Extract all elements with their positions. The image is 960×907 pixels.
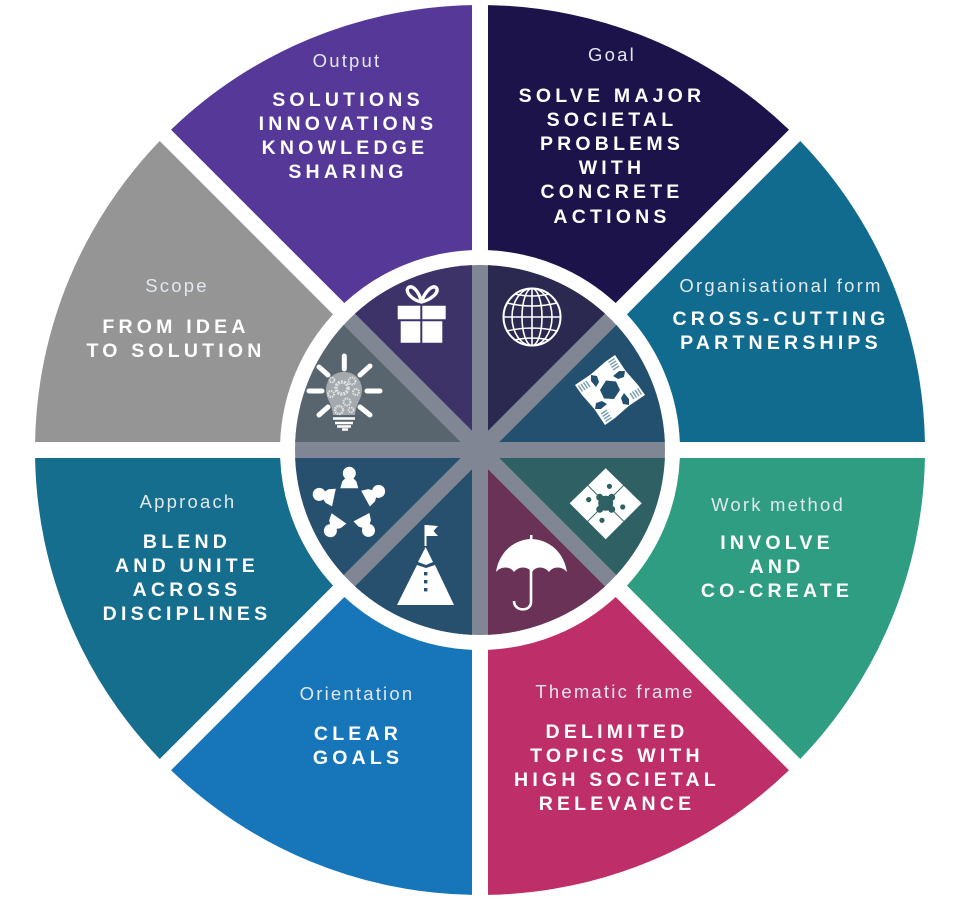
panel: output — [171, 5, 472, 303]
segment: goal — [488, 5, 789, 303]
icon: globe — [504, 288, 560, 346]
panel: orientation — [171, 597, 472, 895]
panel: thematic frame — [488, 597, 789, 895]
heading: work method: AND — [750, 556, 804, 578]
segment: work method — [627, 458, 925, 759]
panel: organisational form — [627, 141, 925, 442]
heading: thematic frame: RELEVANCE — [539, 793, 695, 815]
heading: goal: PROBLEMS — [540, 133, 684, 155]
inner icon disc — [295, 265, 665, 635]
icon: gift — [398, 287, 446, 343]
heading: scope: FROM IDEA — [102, 316, 250, 338]
panel: approach — [35, 458, 333, 759]
heading: goal: SOLVE MAJOR — [519, 85, 705, 107]
label: output: Output — [313, 50, 381, 71]
heading: goal: SOCIETAL — [547, 109, 677, 131]
icon: light bulb with gears — [309, 356, 380, 430]
segment: orientation — [171, 597, 472, 895]
heading: output: SHARING — [288, 161, 408, 183]
heading: goal: CONCRETE — [540, 181, 684, 203]
heading: approach: AND UNITE — [115, 555, 259, 577]
heading: output: SOLUTIONS — [272, 89, 424, 111]
heading: scope: TO SOLUTION — [86, 340, 266, 362]
heading: organisational form: PARTNERSHIPS — [680, 332, 882, 354]
panel: scope — [35, 141, 333, 442]
heading: goal: WITH — [579, 157, 645, 179]
label: goal: Goal — [588, 44, 636, 65]
inner segment: orientation — [355, 469, 472, 635]
segment: output — [171, 5, 472, 303]
icon: puzzle pieces — [570, 468, 642, 539]
heading: orientation: GOALS — [313, 747, 403, 769]
label: orientation: Orientation — [300, 683, 414, 704]
heading: output: INNOVATIONS — [259, 113, 437, 135]
inner segment: work method — [499, 458, 665, 575]
segment: scope — [35, 141, 333, 442]
inner segment: scope — [295, 325, 461, 442]
heading: approach: DISCIPLINES — [103, 603, 271, 625]
heading: thematic frame: HIGH SOCIETAL — [514, 769, 720, 791]
heading: work method: CO-CREATE — [701, 580, 853, 602]
heading: thematic frame: TOPICS WITH — [530, 745, 704, 767]
inner segment: approach — [295, 458, 461, 575]
inner segment: goal — [488, 265, 605, 431]
segment: organisational form — [627, 141, 925, 442]
label: scope: Scope — [145, 275, 209, 296]
label: approach: Approach — [140, 491, 236, 512]
heading: thematic frame: DELIMITED — [546, 721, 688, 743]
inner segment: thematic frame — [488, 469, 605, 635]
icon: mountain with flag — [397, 525, 454, 605]
inner segment: output — [355, 265, 472, 431]
panel: work method — [627, 458, 925, 759]
heading: orientation: CLEAR — [314, 723, 402, 745]
icon: circle of people — [311, 467, 389, 541]
heading: output: KNOWLEDGE — [262, 137, 428, 159]
heading: approach: ACROSS — [133, 579, 241, 601]
panel: goal — [488, 5, 789, 303]
icon: umbrella — [496, 535, 567, 609]
segment: approach — [35, 458, 333, 759]
heading: organisational form: CROSS-CUTTING — [672, 308, 890, 330]
label: thematic frame: Thematic frame — [535, 681, 695, 702]
segment: thematic frame — [488, 597, 789, 895]
label: work method: Work method — [711, 494, 845, 515]
heading: approach: BLEND — [143, 531, 231, 553]
icon: joined hands — [575, 355, 645, 425]
heading: work method: INVOLVE — [720, 532, 834, 554]
inner segment: organisational form — [499, 325, 665, 442]
disc base — [295, 265, 665, 635]
label: organisational form: Organisational form — [679, 275, 883, 296]
heading: goal: ACTIONS — [553, 206, 671, 228]
